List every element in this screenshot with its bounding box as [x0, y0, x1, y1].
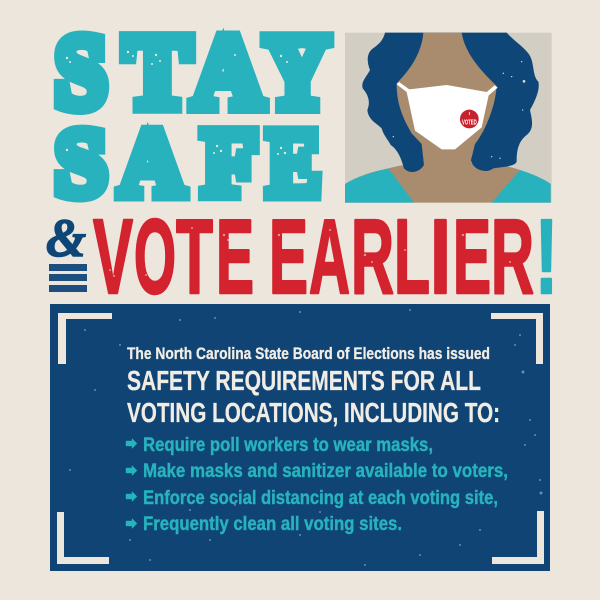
bullet: clean sites: Frequently clean all voting sites. — [143, 514, 402, 535]
heading: VOTE EARLIER: A — [309, 198, 350, 316]
face and neck — [397, 33, 497, 177]
texture: speckles on heading — [109, 227, 511, 277]
title: STAY — [55, 13, 330, 130]
body — [345, 160, 551, 203]
heading: safety requirements: SAFETY REQUIREMENTS FOR ALL — [127, 365, 481, 396]
heading: VOTE EARLIER: E — [453, 198, 491, 316]
corner bracket: bottom left — [57, 512, 109, 564]
title: SAFE: A — [119, 109, 185, 216]
title: SAFE: E — [267, 109, 321, 216]
corner bracket: bottom right — [492, 511, 544, 564]
heading: VOTE EARLIER: O — [134, 198, 176, 316]
corner bracket: top left — [58, 313, 112, 364]
heading: VOTE EARLIER: E — [216, 198, 254, 316]
heading: VOTE EARLIER: L — [394, 198, 430, 316]
heading: VOTE EARLIER: T — [176, 198, 213, 316]
mask — [397, 82, 498, 149]
title: STAY: Y — [264, 13, 330, 130]
sticker: I VOTED — [460, 110, 479, 128]
heading: safety requirements — [127, 365, 500, 428]
sticker: I VOTED: I — [469, 111, 471, 117]
title: SAFE — [55, 109, 321, 216]
bullet: masks for poll workers: Require poll workers to wear masks, — [143, 435, 433, 456]
corner bracket: top right — [491, 313, 543, 364]
title: STAY: T — [124, 13, 191, 130]
list of requirements — [126, 435, 508, 535]
title: SAFE: F — [202, 109, 258, 216]
title: STAY: S — [55, 13, 107, 130]
panel: safety requirements — [50, 304, 550, 571]
heading: VOTE EARLIER: V — [93, 198, 133, 316]
heading: VOTE EARLIER: R — [351, 198, 394, 316]
texture: speckles on title — [66, 51, 288, 155]
illustration: woman wearing mask — [345, 33, 552, 203]
title: STAY: A — [192, 13, 264, 130]
title: SAFE: S — [55, 109, 107, 216]
bullet: social distancing: Enforce social distancing at each voting site, — [143, 488, 498, 509]
exclamation mark: ! — [535, 198, 558, 316]
intro text: The North Carolina State Board of Elections has issued — [127, 345, 490, 363]
heading: VOTE EARLIER: I — [430, 198, 451, 316]
heading: VOTE EARLIER: R — [491, 198, 534, 316]
sticker: I VOTED: VOTED — [462, 117, 477, 126]
hair — [362, 33, 539, 172]
bullet: masks and sanitizer: Make masks and sanitizer available to voters, — [143, 461, 508, 482]
icon: ampersand: & — [46, 208, 86, 268]
heading: VOTE EARLIER — [93, 198, 558, 316]
icon: three stripes — [49, 264, 87, 292]
shirt — [345, 168, 551, 203]
heading: VOTE EARLIER: E — [269, 198, 308, 316]
